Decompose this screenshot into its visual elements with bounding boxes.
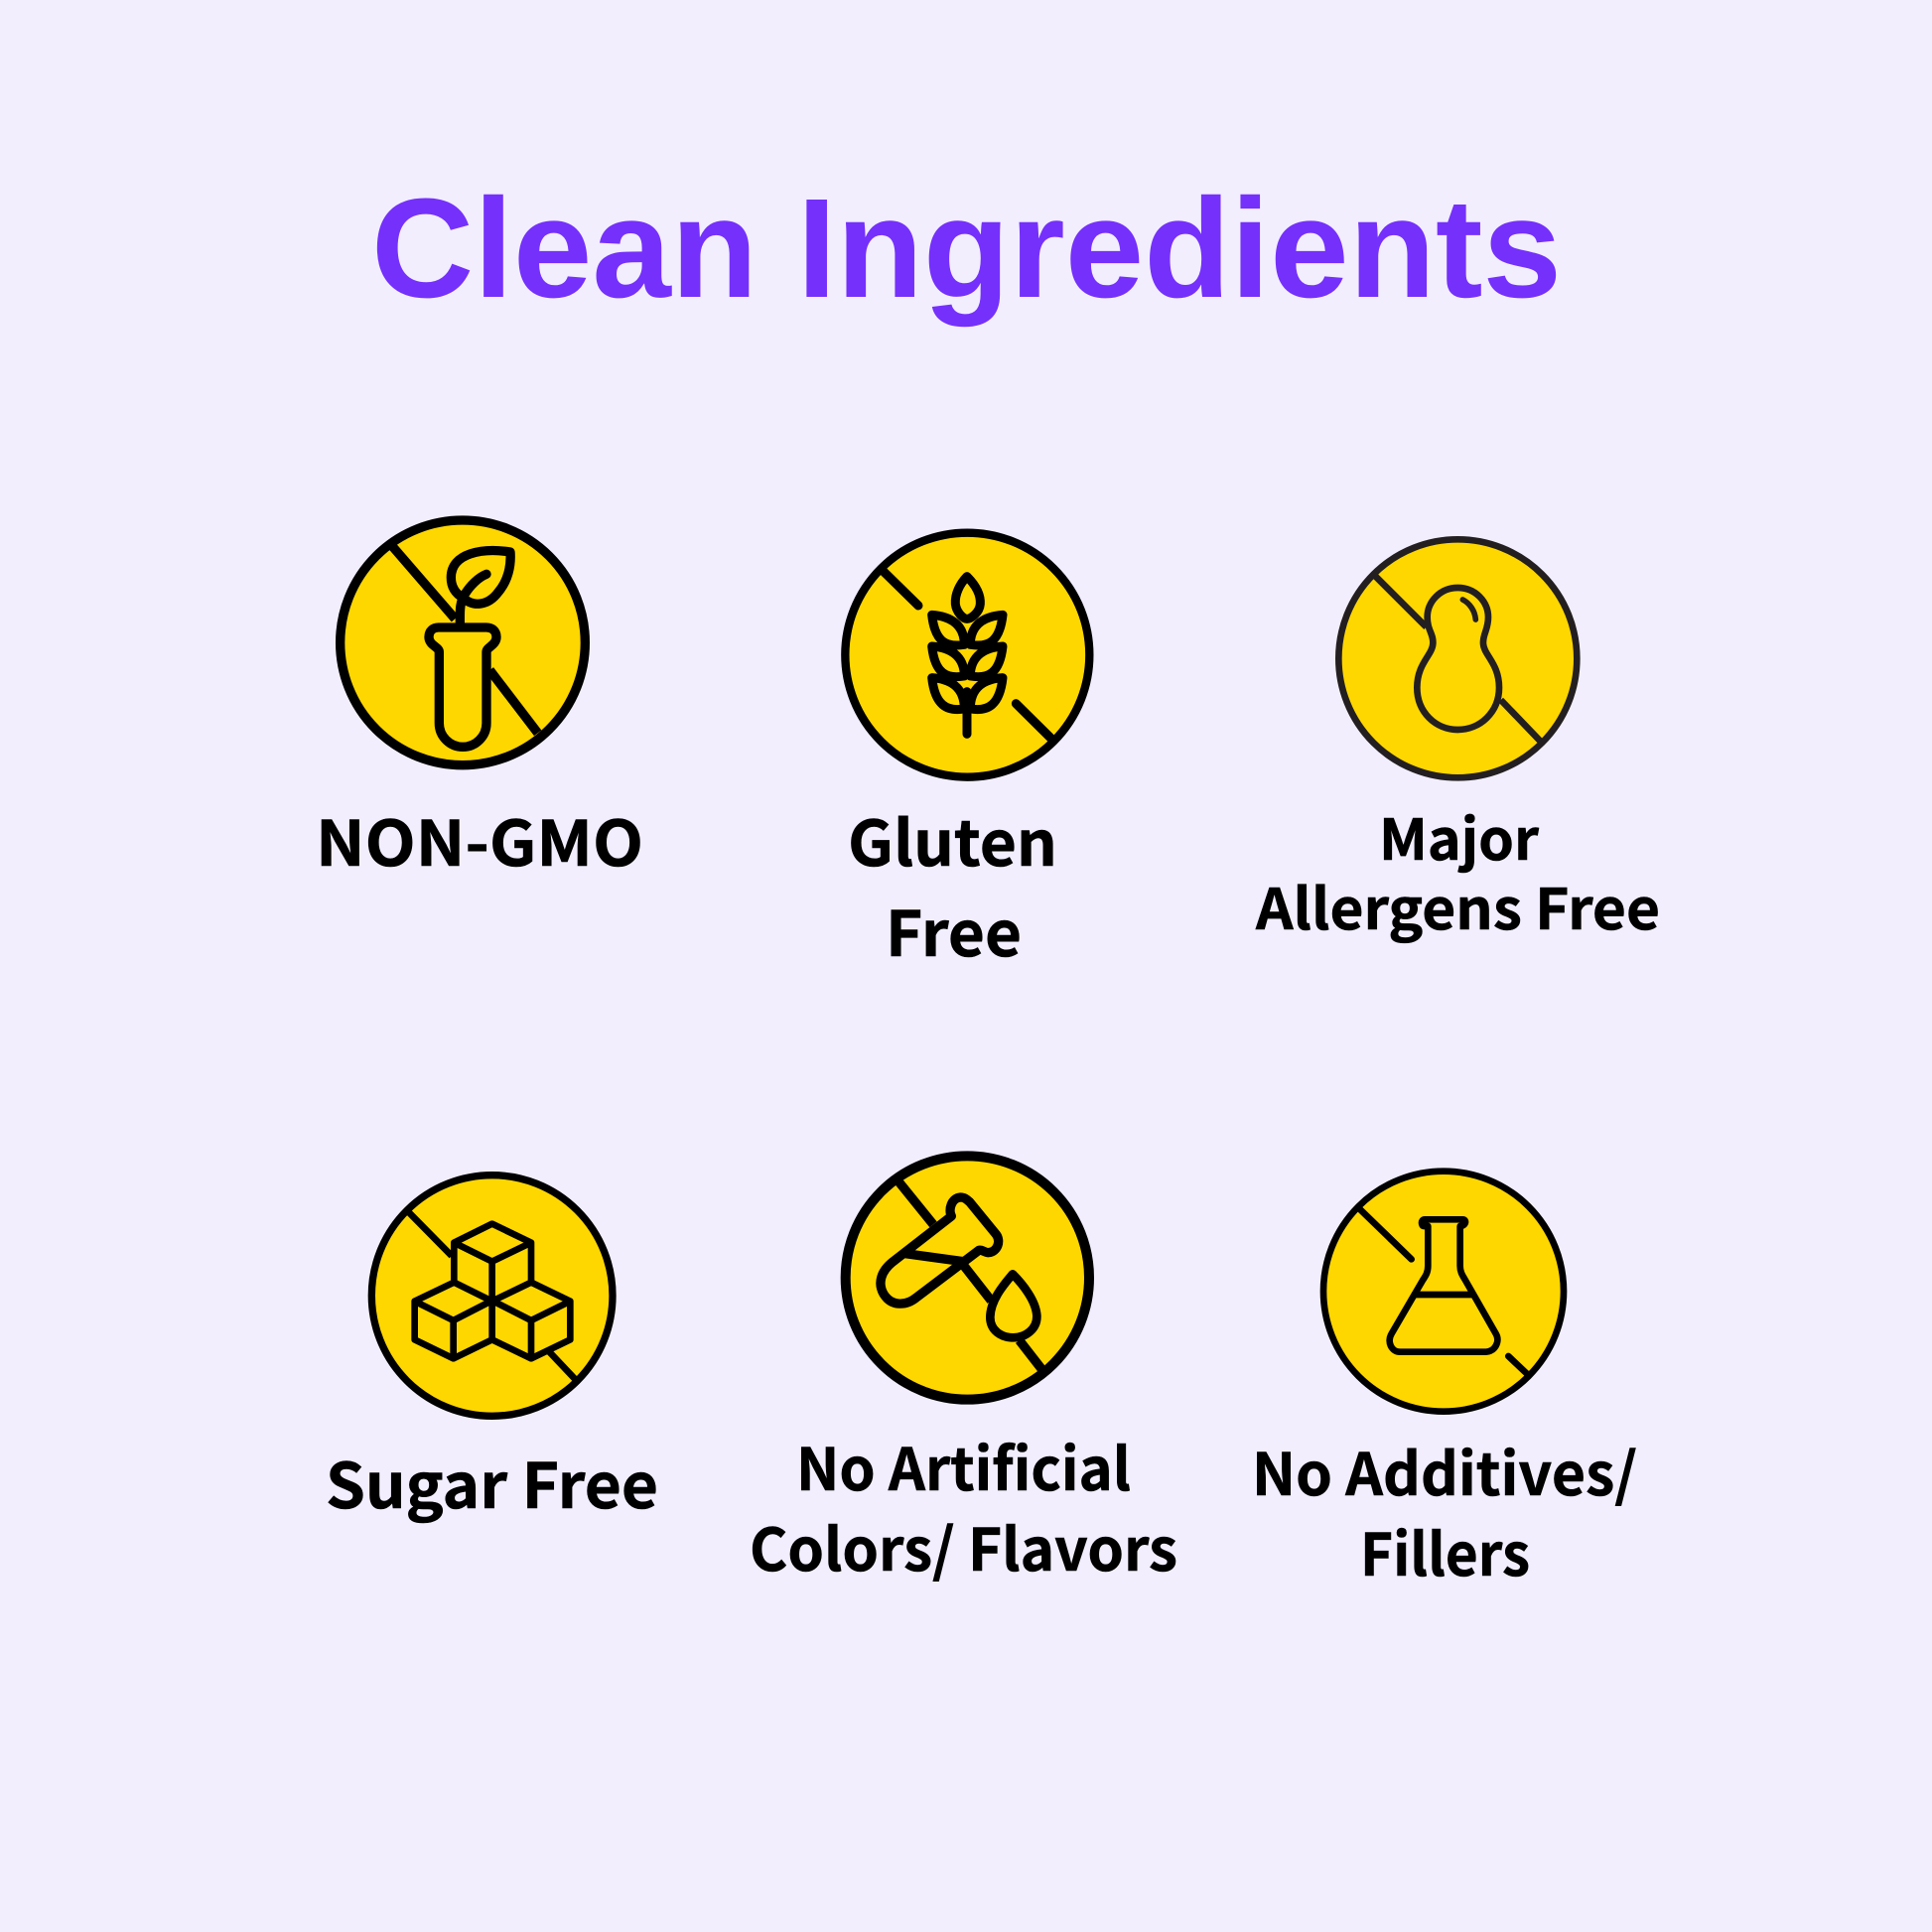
label: Major Allergens Free — [1255, 795, 1660, 946]
label: Major Allergens Free: Allergens Free — [1255, 865, 1660, 946]
title: Clean Ingredients — [371, 170, 1562, 328]
icon: no sugar cubes — [371, 1175, 613, 1416]
label: Sugar Free: Sugar Free — [326, 1437, 658, 1527]
panel: Gluten Free — [845, 533, 1089, 975]
label: No Additives/ Fillers — [1252, 1428, 1637, 1592]
icon: no flask — [1323, 1172, 1564, 1412]
label: No Additives/ Fillers: Fillers — [1360, 1508, 1530, 1592]
label: No Additives/ Fillers: No Additives/ — [1252, 1428, 1637, 1512]
label: No Artificial Colors/ Flavors: No Artificial — [796, 1423, 1131, 1507]
label: No Artificial Colors/ Flavors: Colors/ Flavors — [750, 1503, 1177, 1587]
label: NON-GMO: NON-GMO — [316, 794, 643, 885]
label: Major Allergens Free: Major — [1379, 795, 1539, 877]
icon: no peanut — [1338, 539, 1577, 777]
panel: No Artificial Colors/ Flavors — [750, 1156, 1177, 1587]
label: Gluten Free: Free — [886, 885, 1022, 975]
label: No Artificial Colors/ Flavors — [750, 1423, 1177, 1587]
panel: NON-GMO — [316, 520, 643, 885]
panel: Sugar Free — [326, 1175, 658, 1527]
panel: Major Allergens Free — [1255, 539, 1660, 946]
icon: no GMO test tube with leaf — [341, 520, 585, 765]
label: Gluten Free — [848, 794, 1057, 975]
label: Gluten Free: Gluten — [848, 794, 1057, 885]
icon: no wheat — [845, 533, 1089, 777]
panel: No Additives/ Fillers — [1252, 1172, 1637, 1592]
icon: no artificial colors test tube and drop — [846, 1156, 1089, 1400]
